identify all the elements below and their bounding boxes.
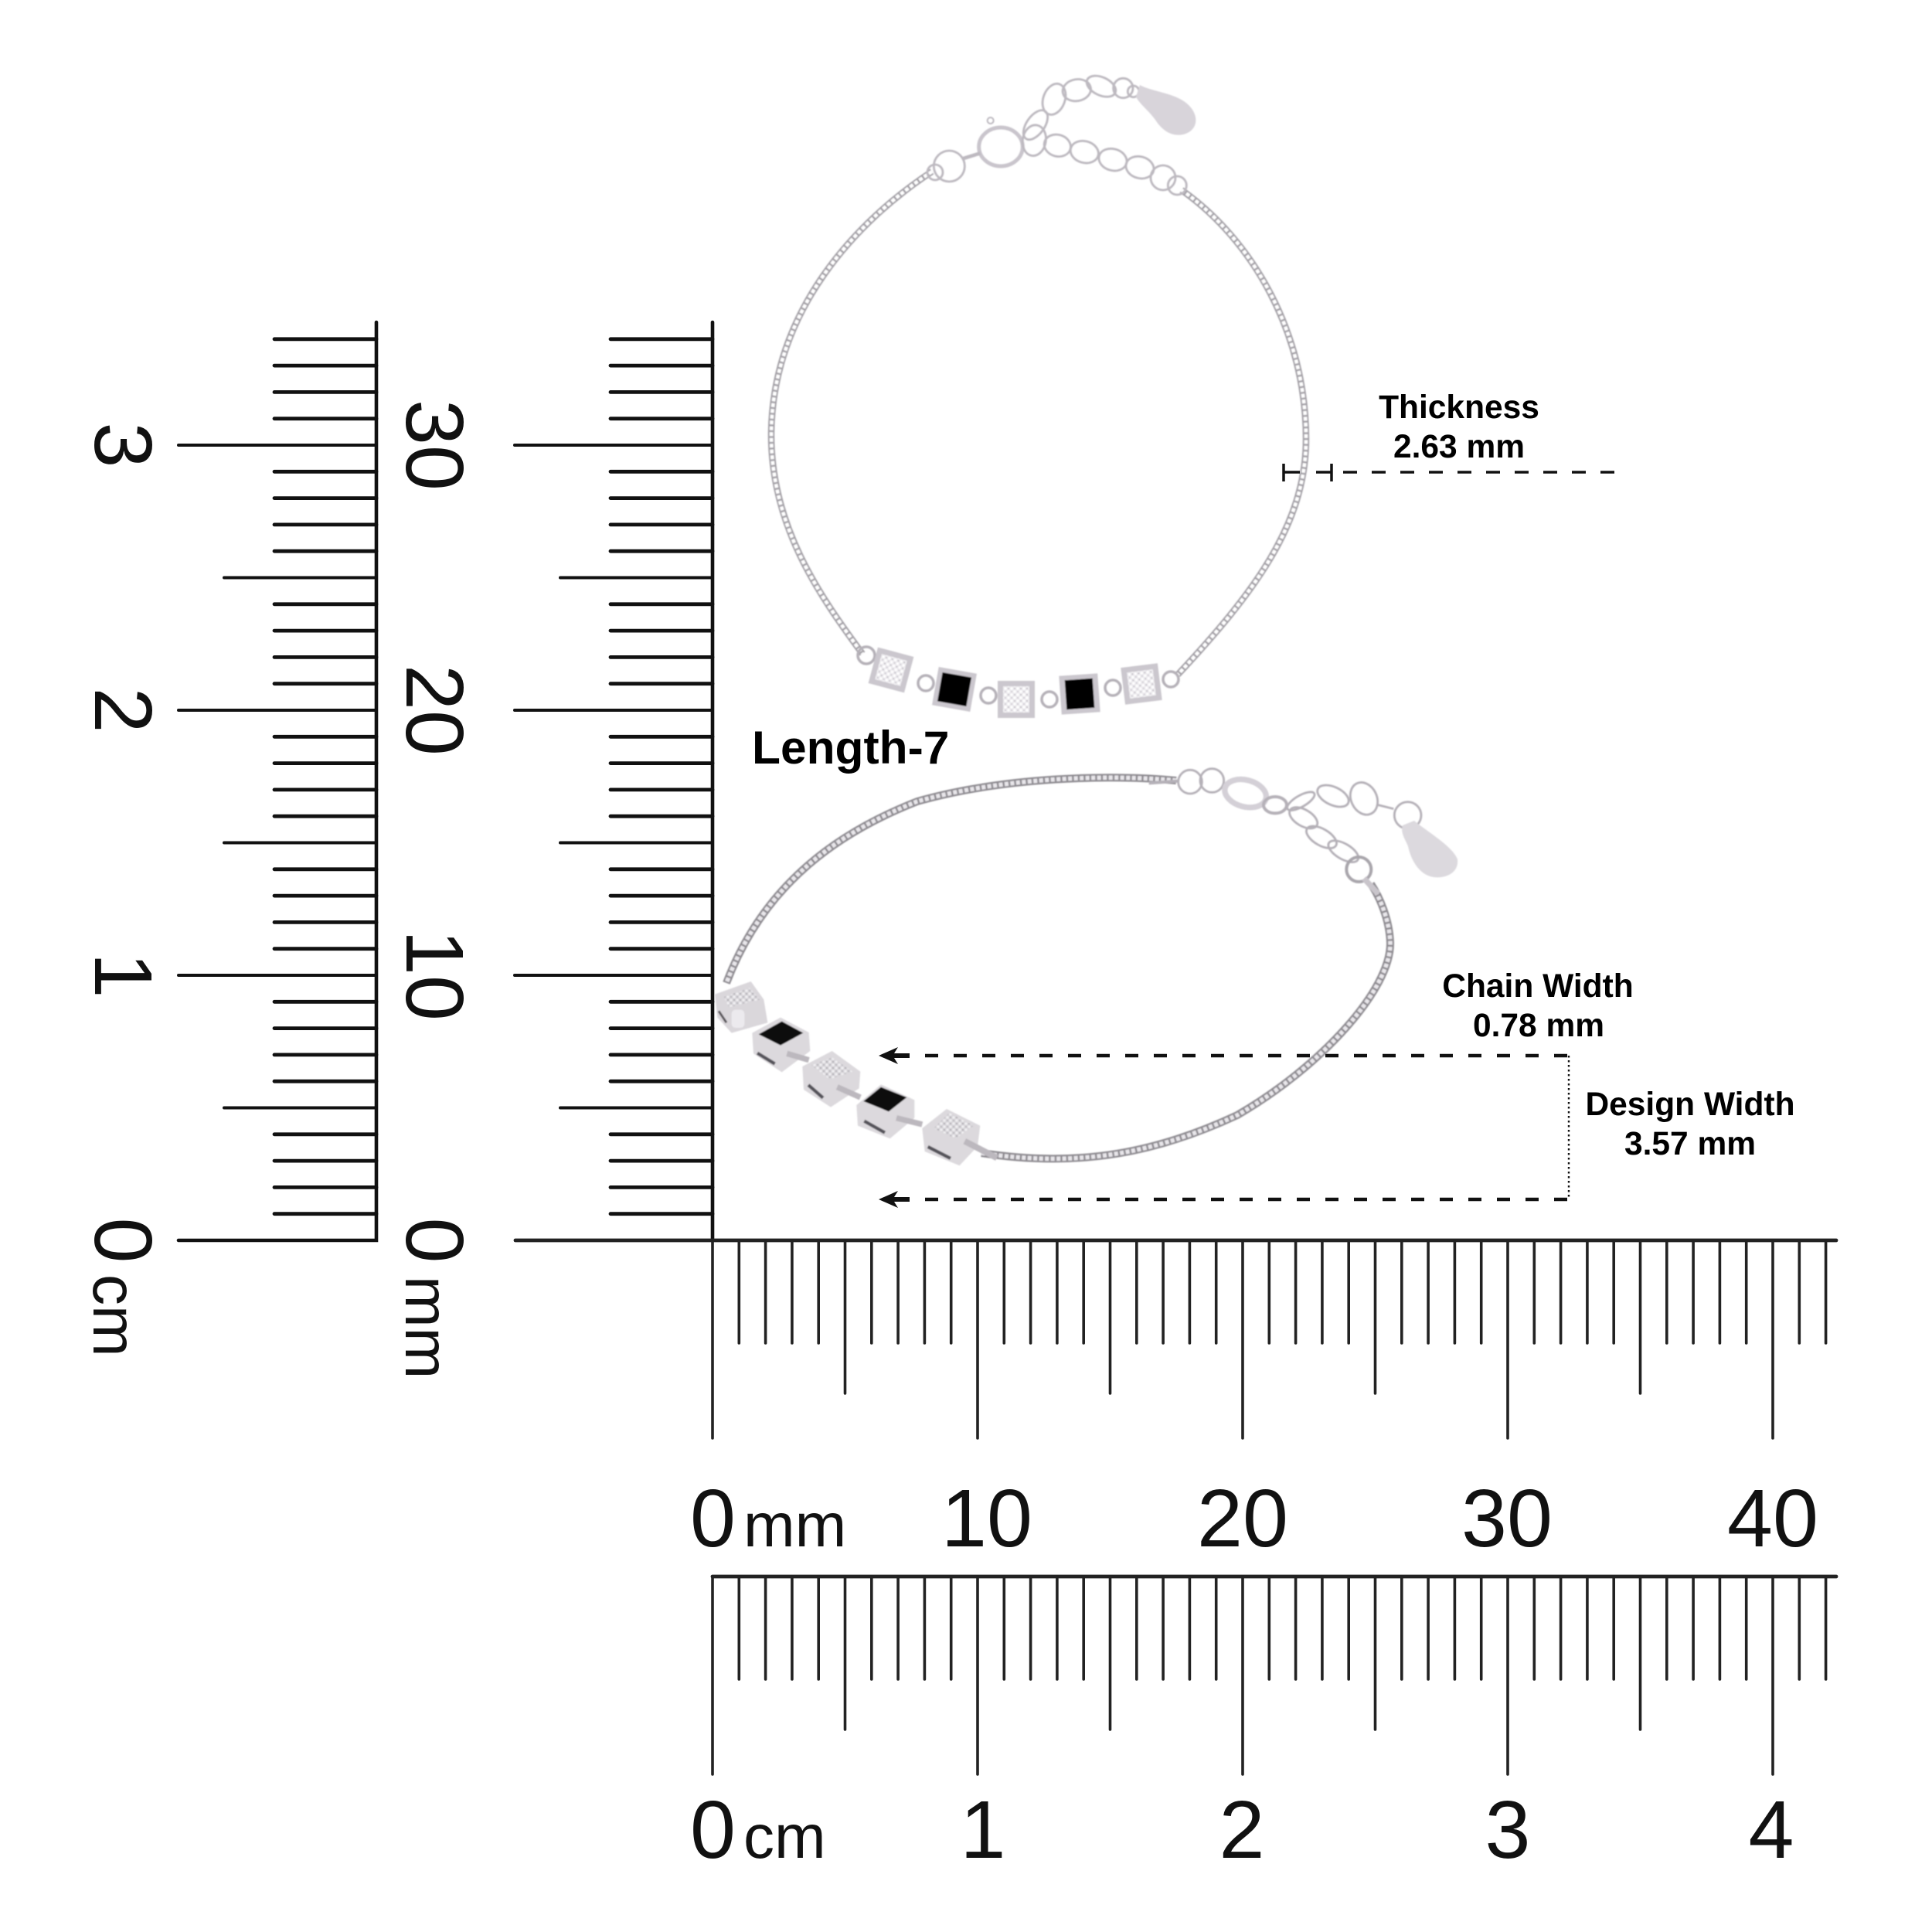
horizontal ruler: centimetres — [690, 1577, 1836, 1876]
charm 2: black — [932, 667, 977, 712]
vertical ruler: millimetres — [389, 322, 713, 1379]
cm ruler ticks — [179, 339, 376, 1214]
label 3: 3 — [1485, 1784, 1530, 1876]
cm label 2: 2 — [77, 688, 168, 733]
mm label 10: 10 — [389, 930, 480, 1021]
length label: Length-7 — [752, 721, 949, 774]
label 20: 20 — [1197, 1473, 1288, 1564]
arrow: chain width — [879, 1047, 910, 1064]
charm 5: pave — [1121, 663, 1162, 705]
unit cm: cm — [743, 1802, 826, 1871]
arrow: design width — [879, 1191, 910, 1208]
mm label 0: 0 — [389, 1218, 480, 1263]
horizontal mm ticks — [713, 1240, 1826, 1438]
mm unit: mm — [393, 1276, 461, 1379]
cm label 0: 0 — [77, 1218, 168, 1263]
unit mm: mm — [743, 1491, 846, 1560]
cube 4: black top — [856, 1084, 922, 1138]
thickness value: 2.63 mm — [1393, 429, 1525, 465]
horizontal cm ticks — [713, 1577, 1826, 1774]
cube charms — [715, 981, 997, 1165]
design width label: Design Width — [1585, 1087, 1795, 1123]
label 2: 2 — [1219, 1784, 1264, 1876]
box chain — [771, 172, 1306, 675]
charm 3: pave — [998, 681, 1035, 718]
charm 4: black — [1059, 673, 1100, 715]
cm label 3: 3 — [77, 423, 168, 468]
horizontal ruler: millimetres — [515, 1240, 1836, 1564]
label 0: 0 — [690, 1784, 736, 1876]
vertical ruler: centimetres — [77, 322, 376, 1357]
cm unit: cm — [80, 1274, 149, 1357]
chain width label: Chain Width — [1442, 968, 1634, 1005]
label 30: 30 — [1461, 1473, 1553, 1564]
mm ruler spine — [711, 322, 714, 1240]
cube 1: pave top — [715, 981, 767, 1033]
mm ruler ticks — [515, 339, 713, 1214]
design width value: 3.57 mm — [1624, 1126, 1756, 1162]
mm label 30: 30 — [389, 400, 480, 491]
bracelet: side view — [715, 769, 1458, 1165]
clasp and extender — [927, 72, 1196, 195]
label 1: 1 — [961, 1784, 1005, 1876]
thickness dimension line — [1284, 464, 1617, 481]
label 4: 4 — [1749, 1784, 1794, 1876]
horizontal cm baseline — [713, 1575, 1836, 1578]
cube 2: black top — [752, 1018, 810, 1072]
thickness annotation — [1284, 389, 1617, 481]
teardrop tag — [1402, 821, 1458, 877]
chain width value: 0.78 mm — [1473, 1008, 1604, 1044]
cm ruler spine — [179, 322, 376, 1240]
mm label 20: 20 — [389, 665, 480, 756]
thickness label: Thickness — [1379, 389, 1539, 426]
horizontal mm baseline — [515, 1239, 1836, 1242]
label 40: 40 — [1727, 1473, 1818, 1564]
cm label 1: 1 — [77, 953, 168, 998]
ring links between charms — [858, 647, 1179, 707]
label 0: 0 — [690, 1473, 736, 1564]
chain and design width annotation — [879, 968, 1795, 1208]
cube 3: pave top — [802, 1051, 860, 1107]
box chain — [726, 777, 1390, 1158]
bracelet: top view — [771, 72, 1306, 718]
teardrop tag — [1136, 85, 1196, 135]
label 10: 10 — [941, 1473, 1032, 1564]
dashed measurement lines — [925, 1056, 1569, 1199]
charm 1: pave — [869, 648, 913, 692]
cube 5: pave top — [922, 1109, 997, 1165]
clasp and extender — [1149, 769, 1421, 894]
